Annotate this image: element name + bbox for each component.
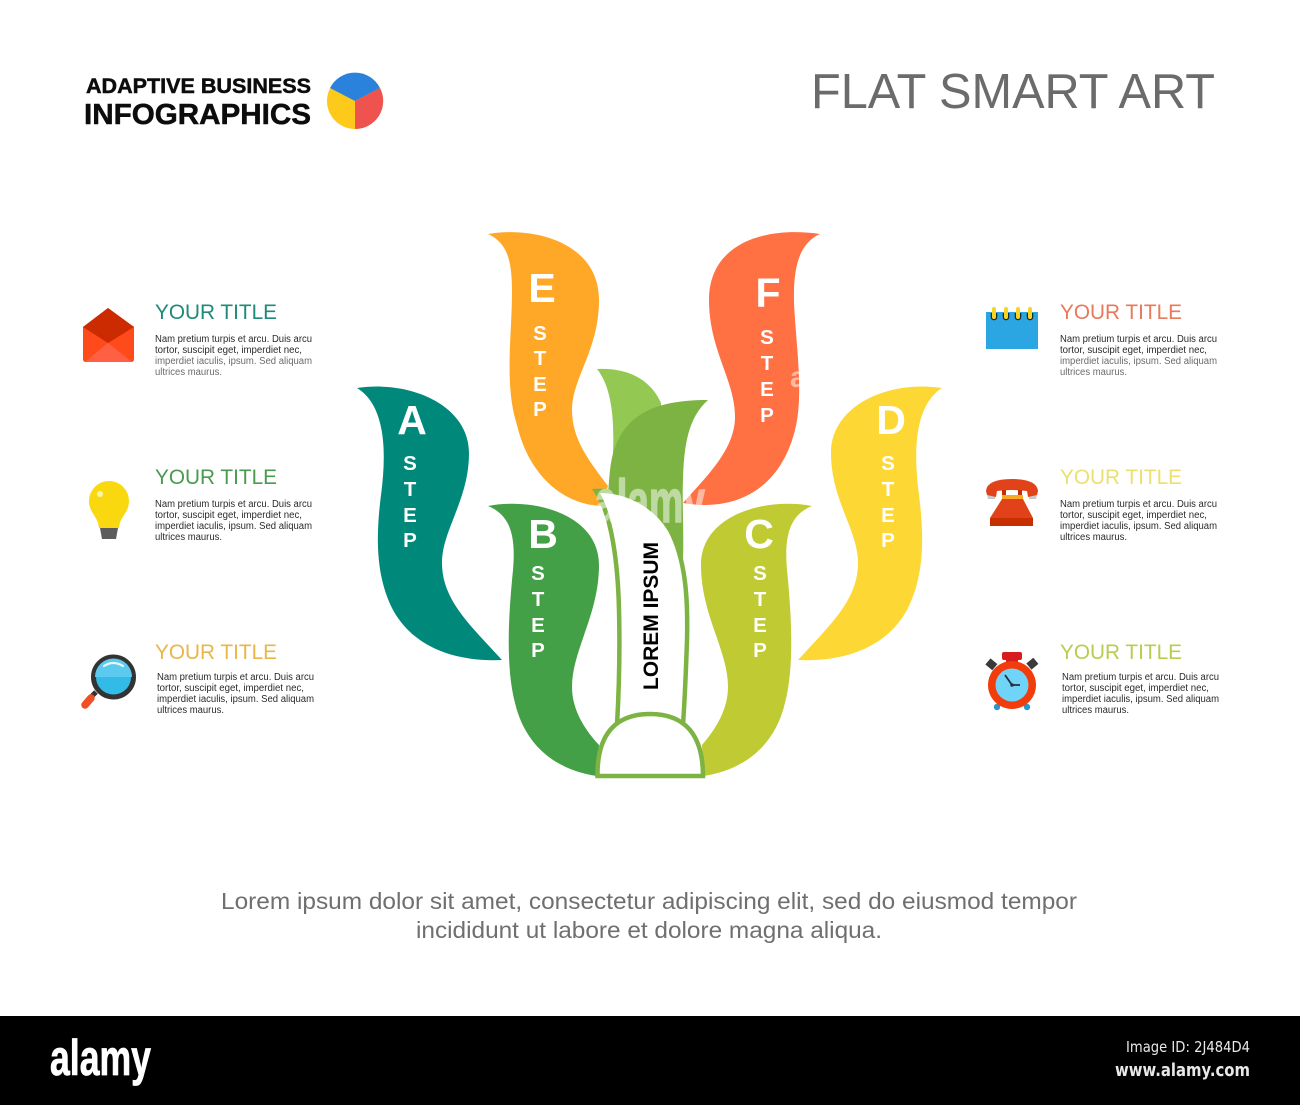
item text: ultrices maurus. bbox=[1062, 705, 1129, 716]
panel: left item 2 bbox=[89, 466, 312, 543]
title: FLAT SMART ART bbox=[811, 65, 1215, 119]
petal C: S bbox=[753, 562, 767, 585]
panel: left item 3 bbox=[85, 641, 314, 716]
logo text: INFOGRAPHICS bbox=[84, 99, 311, 131]
petal D: P bbox=[881, 529, 895, 552]
petal A: P bbox=[403, 529, 417, 552]
icon: telephone bbox=[986, 479, 1038, 526]
logo text: ADAPTIVE BUSINESS bbox=[86, 74, 311, 98]
item text: Nam pretium turpis et arcu. Duis arcu bbox=[157, 672, 314, 683]
item text: imperdiet iaculis, ipsum. Sed aliquam bbox=[1060, 521, 1217, 532]
petal C: P bbox=[753, 639, 767, 662]
icon: alarm clock bbox=[985, 652, 1038, 710]
item text: YOUR TITLE bbox=[1060, 466, 1182, 489]
item text bbox=[155, 641, 314, 716]
flower diagram bbox=[357, 232, 942, 776]
item text bbox=[155, 301, 312, 378]
item text bbox=[155, 466, 312, 543]
item text: imperdiet iaculis, ipsum. Sed aliquam bbox=[155, 521, 312, 532]
item text: ultrices maurus. bbox=[155, 367, 222, 378]
item text: ultrices maurus. bbox=[1060, 532, 1127, 543]
petal F: T bbox=[761, 352, 774, 375]
item text: Nam pretium turpis et arcu. Duis arcu bbox=[1060, 334, 1217, 345]
petal C: E bbox=[753, 614, 767, 637]
icon: calendar bbox=[986, 307, 1038, 349]
item text: YOUR TITLE bbox=[155, 466, 277, 489]
icon: tri-colour pie bbox=[327, 73, 383, 129]
petal E: T bbox=[534, 347, 547, 370]
petal D: E bbox=[881, 504, 895, 527]
item text: ultrices maurus. bbox=[157, 705, 224, 716]
center stem bbox=[596, 491, 687, 725]
petal E: P bbox=[533, 398, 547, 421]
petal F: E bbox=[760, 378, 774, 401]
item text: Nam pretium turpis et arcu. Duis arcu bbox=[1060, 499, 1217, 510]
footer logo: alamy bbox=[50, 1030, 151, 1086]
item text: YOUR TITLE bbox=[1060, 301, 1182, 324]
petal A bbox=[357, 387, 502, 660]
petal D bbox=[798, 387, 942, 660]
item text bbox=[1060, 641, 1219, 716]
petal F: P bbox=[760, 404, 774, 427]
panel: left item 1 bbox=[83, 301, 312, 378]
item text: YOUR TITLE bbox=[155, 641, 277, 664]
petal F: S bbox=[760, 326, 774, 349]
item text: Nam pretium turpis et arcu. Duis arcu bbox=[155, 499, 312, 510]
leaf: light green bbox=[597, 369, 661, 470]
leaf: dark green bbox=[608, 400, 708, 560]
watermark fragments: a bbox=[790, 361, 807, 394]
watermark fragments: alamy bbox=[595, 468, 705, 535]
center dome bbox=[597, 714, 703, 776]
petal D: D bbox=[876, 397, 906, 443]
petal A: T bbox=[404, 478, 417, 501]
item text: tortor, suscipit eget, imperdiet nec, bbox=[157, 683, 304, 694]
footer bar bbox=[0, 1016, 1300, 1105]
petal A: S bbox=[403, 452, 417, 475]
logo text bbox=[84, 74, 311, 131]
petal C bbox=[701, 504, 812, 776]
petal E: E bbox=[528, 265, 556, 311]
stem label: LOREM IPSUM bbox=[638, 542, 663, 690]
petal C: C bbox=[744, 511, 774, 557]
petal E bbox=[488, 232, 608, 506]
petal B bbox=[488, 504, 599, 776]
bottom description bbox=[221, 888, 1077, 943]
petal F: F bbox=[755, 270, 781, 316]
petal A: A bbox=[397, 397, 427, 443]
item text: Nam pretium turpis et arcu. Duis arcu bbox=[155, 334, 312, 345]
petal B: P bbox=[531, 639, 545, 662]
petal D: S bbox=[881, 452, 895, 475]
petal B: T bbox=[532, 588, 545, 611]
item text: tortor, suscipit eget, imperdiet nec, bbox=[155, 345, 302, 356]
petal B: E bbox=[531, 614, 545, 637]
petal F bbox=[683, 232, 820, 505]
petal E: E bbox=[533, 373, 547, 396]
icon: envelope bbox=[83, 308, 134, 362]
item text: ultrices maurus. bbox=[1060, 367, 1127, 378]
item text bbox=[1060, 301, 1217, 378]
bottom description: Lorem ipsum dolor sit amet, consectetur adipiscing elit, sed do eiusmod tempor bbox=[221, 888, 1077, 914]
panel: right item 2 bbox=[986, 466, 1217, 543]
petal E: S bbox=[533, 322, 547, 345]
item text: YOUR TITLE bbox=[155, 301, 277, 324]
item text: tortor, suscipit eget, imperdiet nec, bbox=[1060, 345, 1207, 356]
panel: right item 3 bbox=[985, 641, 1219, 716]
petal A: E bbox=[403, 504, 417, 527]
image id: Image ID: 2J484D4 bbox=[1126, 1038, 1250, 1056]
footer url: www.alamy.com bbox=[1115, 1061, 1250, 1081]
icon: light bulb bbox=[89, 481, 129, 539]
item text: imperdiet iaculis, ipsum. Sed aliquam bbox=[157, 694, 314, 705]
item text: tortor, suscipit eget, imperdiet nec, bbox=[1060, 510, 1207, 521]
item text: YOUR TITLE bbox=[1060, 641, 1182, 664]
item text: tortor, suscipit eget, imperdiet nec, bbox=[1062, 683, 1209, 694]
header logo bbox=[84, 73, 383, 131]
icon: magnifier bbox=[85, 657, 134, 705]
item text: Nam pretium turpis et arcu. Duis arcu bbox=[1062, 672, 1219, 683]
petal C: T bbox=[754, 588, 767, 611]
petal B: B bbox=[528, 511, 558, 557]
petal D: T bbox=[882, 478, 895, 501]
item text: imperdiet iaculis, ipsum. Sed aliquam bbox=[155, 356, 312, 367]
item text: imperdiet iaculis, ipsum. Sed aliquam bbox=[1062, 694, 1219, 705]
item text: ultrices maurus. bbox=[155, 532, 222, 543]
watermark fragments bbox=[595, 361, 807, 535]
item text: tortor, suscipit eget, imperdiet nec, bbox=[155, 510, 302, 521]
item text bbox=[1060, 466, 1217, 543]
petal B: S bbox=[531, 562, 545, 585]
bottom description: incididunt ut labore et dolore magna aliqua. bbox=[416, 917, 882, 943]
item text: imperdiet iaculis, ipsum. Sed aliquam bbox=[1060, 356, 1217, 367]
panel: right item 1 bbox=[986, 301, 1217, 378]
